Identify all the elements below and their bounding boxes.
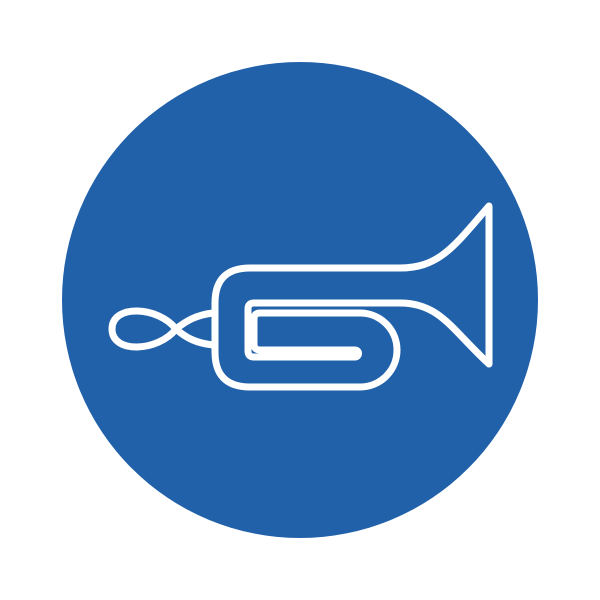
mouthpiece [112,311,213,347]
horn outline [112,206,489,387]
horn body and bell [215,206,489,387]
blue circle background [62,62,538,538]
